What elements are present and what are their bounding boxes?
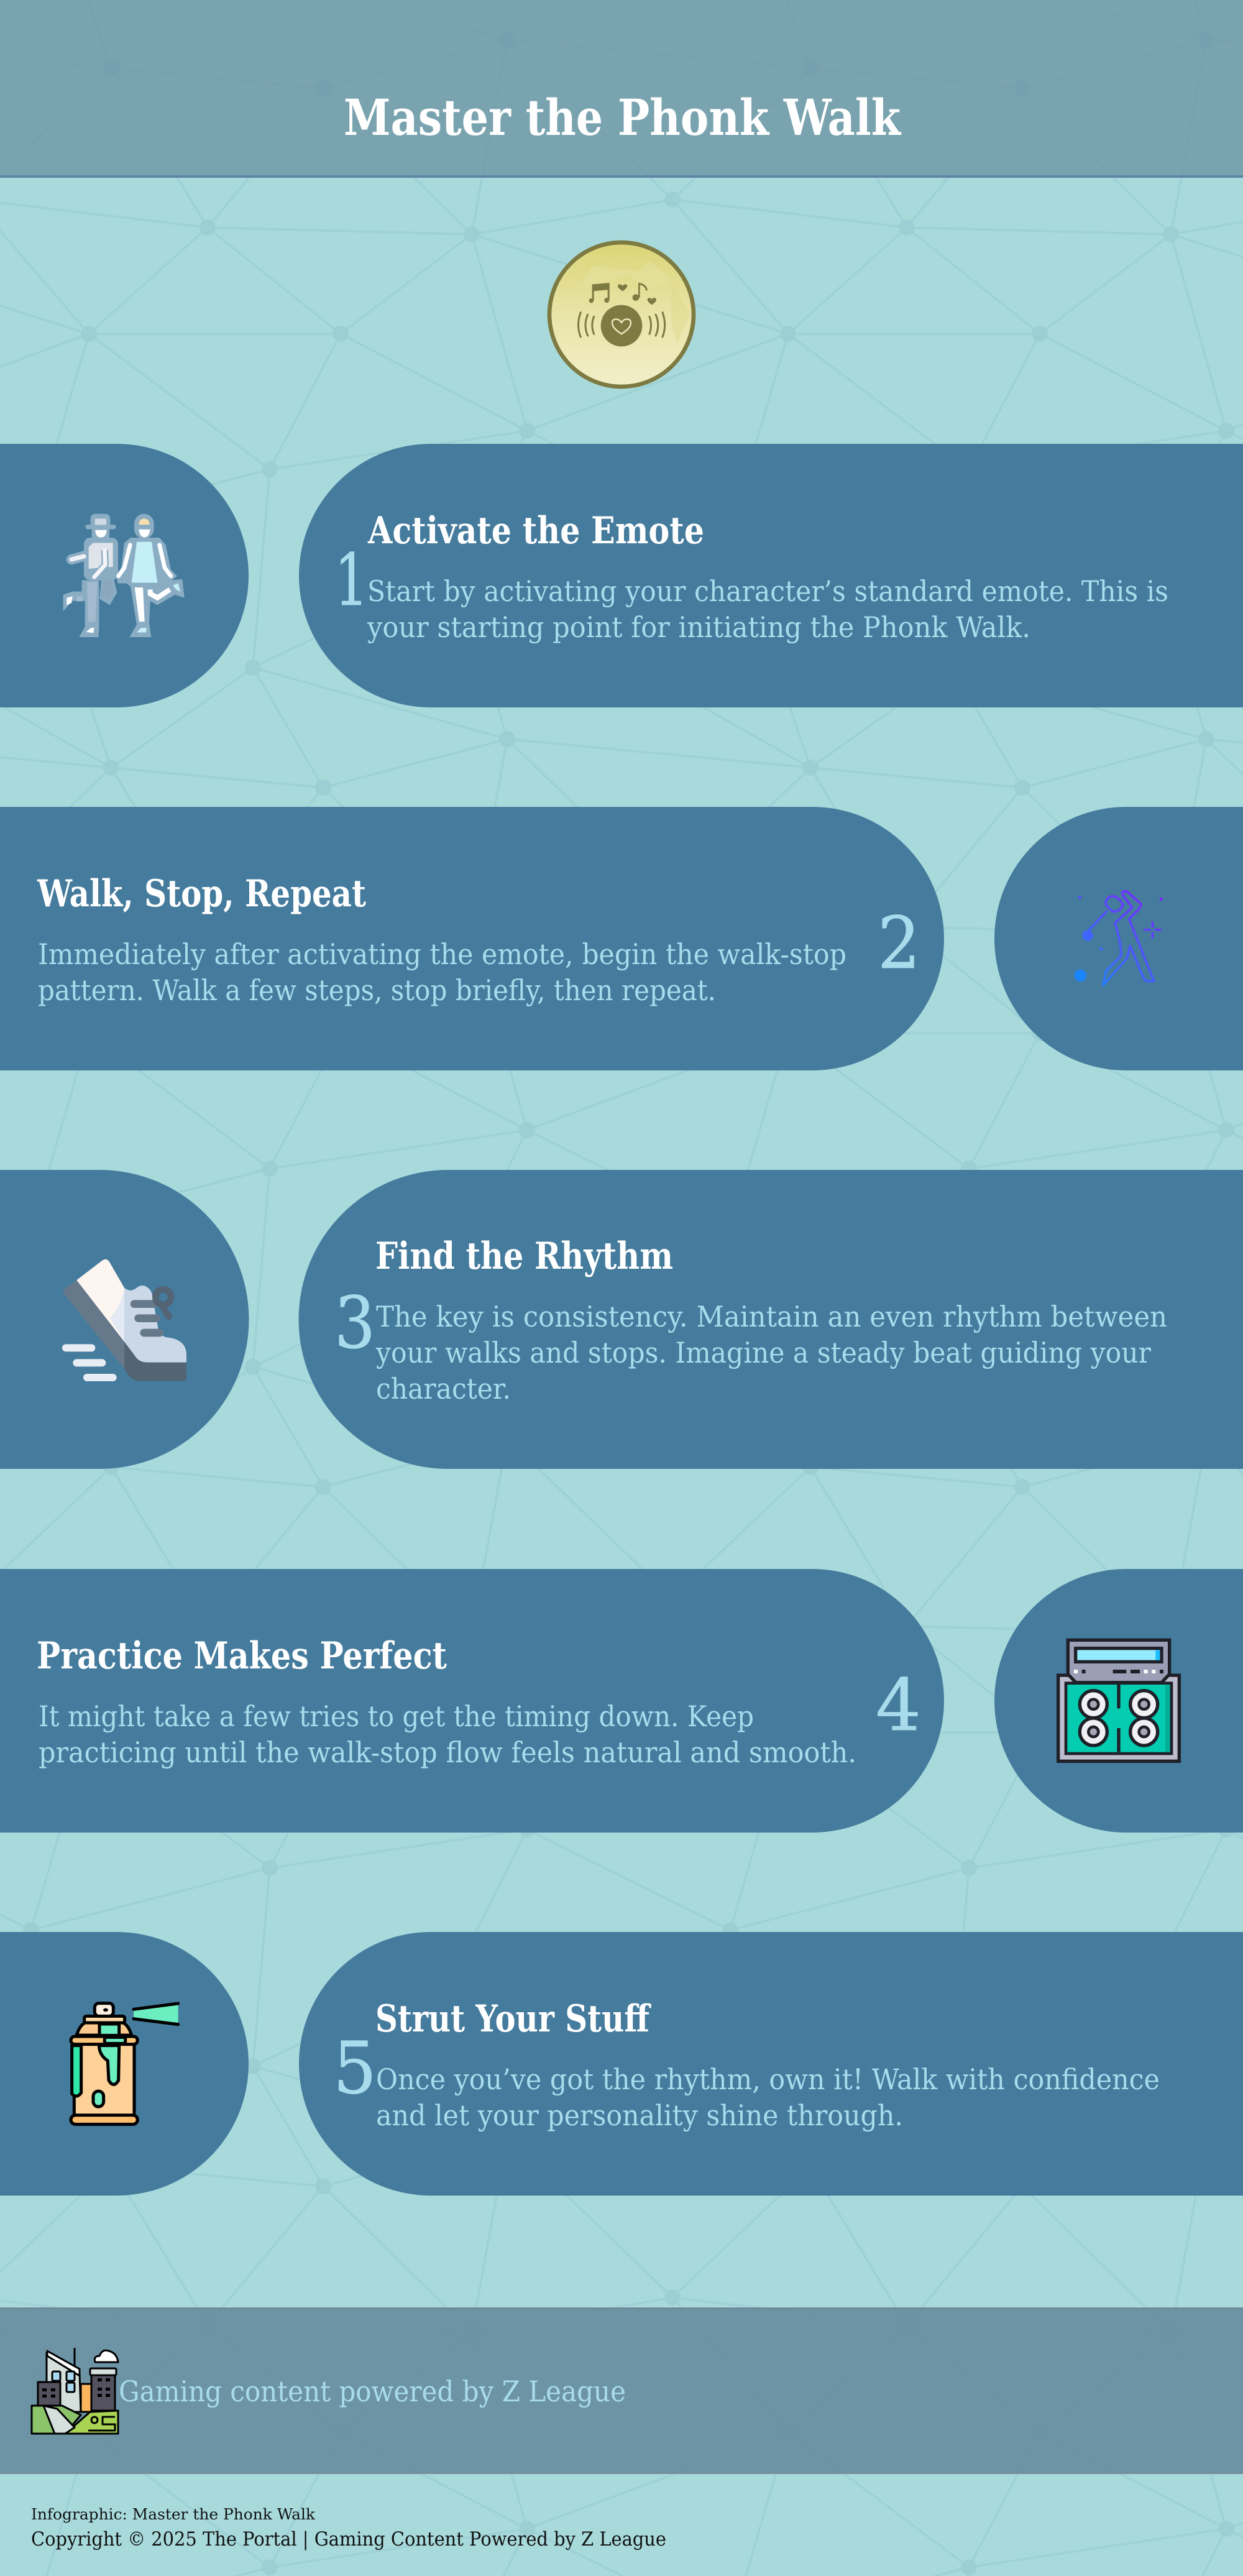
- body text: step 3: [375, 1300, 1167, 1405]
- credits: Infographic: Master the Phonk Walk: [31, 2506, 315, 2523]
- body text: step 2: [38, 937, 846, 1007]
- body text: step 1: [367, 574, 1168, 644]
- step number 5: 5: [333, 2027, 377, 2110]
- body text: step 4: It might take a few tries to get the timing down. Keep: [39, 1700, 754, 1733]
- icon panel: dancers: [0, 444, 249, 707]
- icon: boombox: [1058, 1640, 1179, 1761]
- panel: step 1: [0, 444, 1243, 707]
- body text: step 2: Immediately after activating the emote, begin the walk-stop: [38, 937, 846, 971]
- text panel: step 2: [0, 807, 944, 1070]
- step number 2: 2: [878, 902, 920, 985]
- body text: step 3: character.: [376, 1372, 511, 1405]
- text panel: step 5: [299, 1932, 1243, 2196]
- heading: Find the Rhythm: Find the Rhythm: [375, 1235, 673, 1278]
- body text: step 2: pattern. Walk a few steps, stop briefly, then repeat.: [38, 973, 716, 1007]
- panel: step 5: [0, 1932, 1243, 2196]
- header band: [0, 0, 1243, 178]
- icon panel: boombox: [994, 1569, 1243, 1833]
- body text: step 5: and let your personality shine through.: [376, 2099, 903, 2132]
- step number 3: 3: [334, 1282, 375, 1365]
- footer band: [0, 2307, 1243, 2474]
- icon panel: shoe: [0, 1170, 249, 1469]
- step number 4: 4: [876, 1664, 921, 1747]
- text panel: step 4: [0, 1569, 944, 1833]
- body text: step 4: practicing until the walk-stop flow feels natural and smooth.: [39, 1736, 856, 1769]
- step number 1: 1: [334, 539, 369, 622]
- text panel: step 3: [298, 1170, 1243, 1469]
- credits: [31, 2506, 666, 2551]
- body text: step 1: Start by activating your character’s standard emote. This is: [367, 574, 1168, 608]
- icon: city: [32, 2348, 118, 2434]
- body text: step 4: [39, 1700, 856, 1769]
- icon: golfer: [1075, 891, 1163, 985]
- body text: step 5: [376, 2063, 1160, 2132]
- heading: Activate the Emote: Activate the Emote: [367, 509, 704, 553]
- icon: music disc badge: [549, 242, 694, 387]
- icon: running shoe: [63, 1259, 186, 1381]
- body text: step 3: The key is consistency. Maintain an even rhythm between: [376, 1300, 1167, 1333]
- heading: Walk, Stop, Repeat: Walk, Stop, Repeat: [37, 872, 366, 916]
- heading: Practice Makes Perfect: Practice Makes Perfect: [37, 1634, 447, 1678]
- icon panel: spray can: [0, 1932, 249, 2196]
- panel: step 2: [0, 807, 1243, 1070]
- icon panel: golfer: [994, 807, 1243, 1070]
- panel: step 4: [0, 1569, 1243, 1833]
- credits: Copyright © 2025 The Portal | Gaming Content Powered by Z League: [31, 2528, 666, 2551]
- footer tagline: Gaming content powered by Z League: [119, 2375, 626, 2408]
- text panel: step 1: [299, 444, 1243, 707]
- body text: step 5: Once you’ve got the rhythm, own it! Walk with confidence: [376, 2063, 1160, 2096]
- panel: step 3: [0, 1170, 1243, 1469]
- icon: two dancers: [63, 514, 185, 637]
- body text: step 3: your walks and stops. Imagine a steady beat guiding your: [375, 1336, 1151, 1369]
- body text: step 1: your starting point for initiating the Phonk Walk.: [367, 610, 1030, 644]
- icon: spray can: [71, 2003, 178, 2124]
- heading: Strut Your Stuff: Strut Your Stuff: [375, 1997, 651, 2041]
- title: Master the Phonk Walk: [344, 88, 901, 147]
